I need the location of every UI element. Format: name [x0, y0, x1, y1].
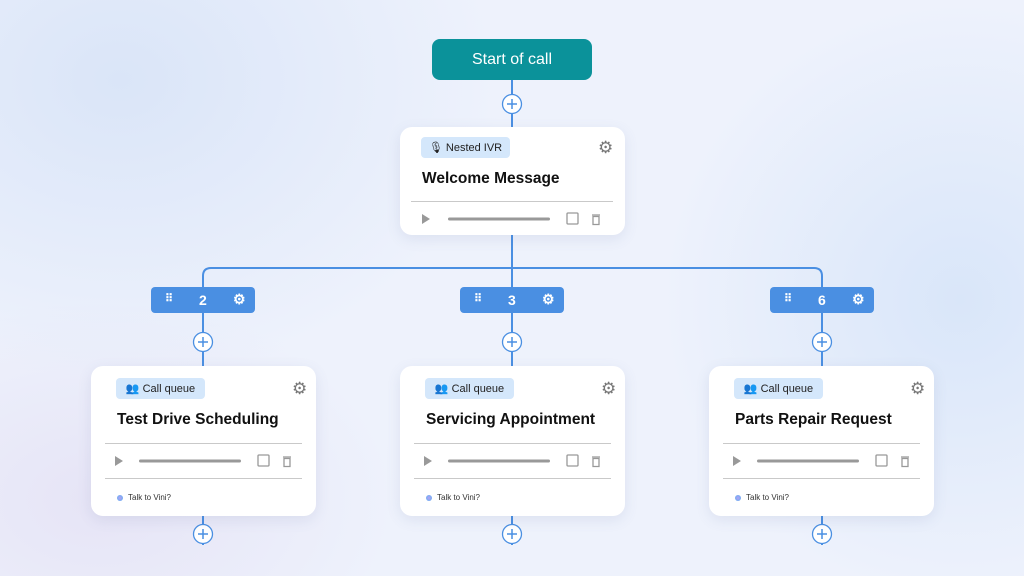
start of call button: Start of call	[472, 50, 552, 68]
key badge 3	[460, 287, 564, 313]
key badge 6	[770, 287, 874, 313]
key badge 3: ⚙	[542, 291, 555, 307]
key badge 2: ⠿	[165, 293, 173, 305]
key badge 3: 3	[508, 292, 516, 308]
card: test drive scheduling: 👥 Call queue	[126, 383, 195, 395]
card: welcome message: Welcome Message	[422, 170, 560, 187]
card: parts repair request	[709, 366, 934, 516]
key badge 2: 2	[199, 292, 207, 308]
card: test drive scheduling	[91, 366, 316, 516]
key badge 6: 6	[818, 292, 826, 308]
key badge 6: ⠿	[784, 293, 792, 305]
key badge 3: ⠿	[474, 293, 482, 305]
key badge 2	[151, 287, 255, 313]
card: test drive scheduling: Talk to Vini?	[128, 493, 171, 502]
card: test drive scheduling: ⚙	[292, 379, 307, 398]
start of call button	[432, 39, 592, 80]
card: test drive scheduling: Test Drive Scheduling	[117, 411, 279, 428]
card: servicing appointment: Servicing Appointment	[426, 411, 595, 428]
card: parts repair request: ⚙	[910, 379, 925, 398]
key badge 6: ⚙	[852, 291, 865, 307]
card: parts repair request: Parts Repair Request	[735, 411, 892, 428]
card: welcome message	[400, 127, 625, 235]
card: parts repair request: Talk to Vini?	[746, 493, 789, 502]
card: parts repair request: 👥 Call queue	[744, 383, 813, 395]
card: welcome message: 🎙 Nested IVR	[429, 142, 502, 154]
card: welcome message: ⚙	[598, 138, 613, 157]
card: servicing appointment	[400, 366, 625, 516]
card: servicing appointment: Talk to Vini?	[437, 493, 480, 502]
card: servicing appointment: 👥 Call queue	[435, 383, 504, 395]
card: servicing appointment: ⚙	[601, 379, 616, 398]
key badge 2: ⚙	[233, 291, 246, 307]
